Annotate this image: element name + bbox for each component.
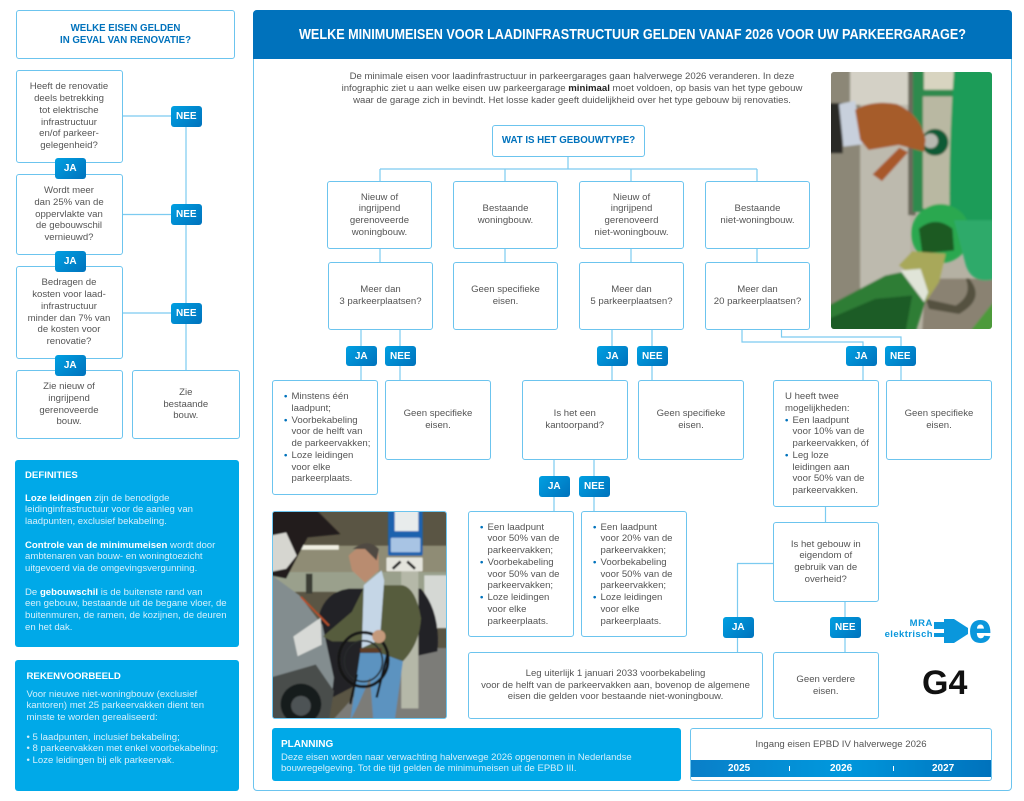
question: more than 3: 3 parkeerplaatsen?	[339, 296, 422, 307]
MRA text: MRA	[910, 618, 933, 629]
question: more than 3: Meer dan	[360, 284, 401, 295]
answer: no requirements	[453, 262, 558, 330]
badge NEE 3	[171, 303, 202, 324]
main header	[253, 10, 1012, 59]
building type 1: ingrijpend	[359, 203, 400, 214]
badge NEE 1: NEE	[176, 111, 197, 122]
definities text: en het dak.	[25, 622, 72, 633]
requirements: new housing: voor elke	[292, 462, 330, 472]
two options box: U heeft twee	[785, 391, 839, 402]
badge NEE: NEE	[584, 481, 605, 492]
answer: no requirements: Geen specifieke	[905, 408, 973, 419]
requirements: non-office: voor elke	[600, 604, 639, 615]
requirements: new housing	[272, 380, 378, 495]
renovation question 2: dan 25% van de	[34, 197, 104, 208]
renovation question 1: Heeft de renovatie	[30, 81, 108, 92]
two options box: •	[785, 450, 788, 461]
logo: G4: G4	[922, 664, 967, 702]
renovation question 3: Bedragen de	[42, 277, 96, 288]
planning heading: PLANNING	[281, 739, 333, 750]
requirements: new housing: voor de helft van	[292, 426, 362, 437]
timeline bar	[691, 760, 991, 777]
requirements: non-office: parkeerplaats.	[600, 616, 661, 626]
building type 4: niet-woningbouw.	[720, 215, 795, 226]
requirements: non-office: •	[593, 522, 596, 532]
badge JA 2	[55, 251, 86, 272]
requirements: new housing: Loze leidingen	[292, 450, 353, 461]
answer: no requirements	[385, 380, 491, 460]
renovation question 2: vernieuwd?	[44, 232, 94, 243]
badge JA 1	[55, 158, 86, 178]
timeline bar: 2027	[932, 763, 954, 774]
requirements: office: Voorbekabeling	[488, 557, 554, 568]
requirements: office: •	[480, 592, 483, 603]
two options box: leidingen aan	[792, 462, 850, 472]
renovation question 1: en/of parkeer-	[39, 128, 99, 139]
timeline caption: Ingang eisen EPBD IV halverwege 2026	[755, 739, 927, 750]
requirements: office: parkeervakken;	[488, 545, 553, 556]
planning text	[281, 752, 632, 774]
requirements: new housing: de parkeervakken;	[292, 438, 370, 449]
building type 2	[453, 181, 558, 249]
badge NEE	[637, 346, 668, 366]
requirements: new housing: Minstens één	[292, 391, 349, 402]
answer: no requirements: eisen.	[926, 420, 952, 431]
badge JA 1: JA	[64, 163, 77, 174]
definities text: ambtenaren van bouw- en woningtoezicht	[25, 551, 203, 562]
two options box: parkeervakken, óf	[792, 438, 869, 449]
question: office building: kantoorpand?	[545, 420, 604, 431]
planning text: Deze eisen worden naar verwachting halverwege 2026 opgenomen in Nederlandse	[281, 752, 632, 762]
elektrisch text: elektrisch	[885, 629, 933, 640]
result: existing build: bestaande	[163, 399, 208, 410]
badge JA: JA	[548, 481, 561, 492]
rekenvoorbeeld list: • Loze leidingen bij elk parkeervak.	[26, 755, 174, 766]
panel: rekenvoorbeeld	[15, 660, 239, 791]
requirements: office: voor 50% van de	[488, 533, 560, 544]
requirements: non-office	[581, 510, 687, 637]
bottom requirement box: Leg uiterlijk 1 januari 2033 voorbekabeling	[526, 668, 705, 679]
requirements: new housing: laadpunt;	[292, 403, 331, 414]
badge NEE: NEE	[835, 622, 856, 633]
definities text: De gebouwschil is de buitenste rand van	[25, 586, 203, 598]
question: more than 20: 20 parkeerplaatsen?	[714, 296, 801, 307]
rekenvoorbeeld intro: kantoren) met 25 parkeervakken dient ten	[26, 700, 204, 711]
badge JA: JA	[855, 351, 868, 362]
result: new build: Zie nieuw of	[43, 381, 95, 392]
badge NEE: NEE	[642, 351, 663, 362]
result: new build: bouw.	[56, 416, 82, 427]
definities text: uitgevoerd via de omgevingsvergunning.	[25, 563, 197, 574]
building type 4: Bestaande	[735, 203, 780, 214]
badge NEE	[830, 617, 860, 638]
photo: man with charging cable	[272, 511, 447, 719]
intro text	[342, 71, 802, 106]
badge JA	[723, 617, 754, 638]
badge NEE: NEE	[890, 351, 911, 362]
two options box: •	[785, 414, 788, 426]
logo: MRA elektrisch	[885, 607, 991, 651]
answer: no further requirements	[773, 652, 878, 719]
renovation question 2	[16, 174, 122, 255]
result: new build: gerenoveerde	[39, 404, 99, 416]
question: gebouwtype	[492, 125, 645, 157]
answer: no requirements	[638, 380, 744, 460]
planning text: bouwregelgeving. Tot die tijd gelden de minimumeisen uit de EPBD III.	[281, 763, 577, 774]
intro text: infographic ziet u aan welke eisen uw parkeergarage minimaal moet voldoen, op basis van het type gebouw	[342, 83, 802, 94]
requirements: non-office: Loze leidingen	[600, 592, 662, 603]
badge JA: JA	[355, 351, 368, 362]
answer: no further requirements: eisen.	[813, 686, 839, 696]
requirements: office: parkeervakken;	[488, 580, 553, 591]
building type 4	[705, 181, 810, 249]
badge NEE 2	[171, 204, 202, 224]
result: new build	[16, 370, 122, 439]
renovation question 1: infrastructuur	[41, 116, 97, 128]
question: office building: Is het een	[554, 408, 596, 419]
renovation question 3: infrastructuur	[41, 301, 97, 312]
requirements: office: Een laadpunt	[488, 522, 544, 532]
answer: no requirements: eisen.	[425, 420, 451, 431]
definities text: buitenmuren, de ramen, de kozijnen, de deuren	[25, 610, 227, 621]
renovation title box: IN GEVAL VAN RENOVATIE?	[60, 34, 191, 46]
requirements: office: voor elke	[488, 604, 526, 615]
badge NEE	[579, 476, 610, 496]
requirements: office: •	[480, 557, 483, 568]
definities heading: DEFINITIES	[25, 470, 78, 481]
requirements: non-office: Voorbekabeling	[600, 557, 667, 568]
renovation question 3: de kosten voor	[38, 324, 100, 335]
badge JA: JA	[606, 351, 619, 362]
requirements: non-office: parkeervakken;	[600, 545, 666, 556]
requirements: non-office: •	[593, 557, 596, 568]
requirements: office	[468, 510, 574, 637]
bottom requirement box: eisen die gelden voor bestaande niet-woningbouw.	[508, 691, 723, 702]
answer: no further requirements: Geen verdere	[796, 674, 855, 685]
intro text: De minimale eisen voor laadinfrastructuur in parkeergarages gaan halverwege 2026 veranderen. In deze	[350, 71, 794, 82]
definities text: laadpunten, exclusief bekabeling.	[25, 516, 167, 527]
renovation question 1: deels betrekking	[34, 93, 104, 104]
answer: no requirements: eisen.	[678, 420, 704, 431]
requirements: office: •	[480, 522, 483, 532]
requirements: new housing: •	[284, 414, 287, 426]
main panel frame	[253, 10, 1012, 791]
question: government building	[773, 522, 878, 602]
rekenvoorbeeld list	[26, 732, 218, 766]
badge JA 3: JA	[64, 360, 77, 371]
building type 1: Nieuw of	[361, 192, 398, 202]
badge JA 2: JA	[64, 256, 77, 267]
definities text: Loze leidingen zijn de benodigde	[25, 492, 170, 504]
badge NEE 2: NEE	[176, 209, 197, 220]
building type 3: gerenoveerd	[605, 215, 658, 226]
building type 3: Nieuw of	[613, 192, 650, 202]
two options box: Een laadpunt	[792, 414, 849, 426]
requirements: office: voor 50% van de	[488, 568, 560, 580]
requirements: new housing: •	[284, 391, 287, 402]
answer: no requirements: Geen specifieke	[471, 284, 540, 295]
question: more than 5: 5 parkeerplaatsen?	[590, 296, 673, 307]
question: more than 5	[579, 262, 684, 330]
question: government building: gebruik van de	[794, 562, 857, 573]
renovation title box	[16, 10, 235, 59]
result: existing build	[132, 370, 240, 439]
requirements: office: parkeerplaats.	[488, 616, 548, 626]
renovation question 2: oppervlakte van	[35, 209, 103, 220]
bottom requirement box: voor de helft van de parkeervakken aan, bovenop de algemene	[481, 680, 750, 691]
renovation question 2: Wordt meer	[44, 185, 94, 196]
requirements: non-office: voor 20% van de	[600, 533, 672, 544]
renovation question 2: de gebouwschil	[36, 220, 102, 231]
building type 1: gerenoveerde	[350, 215, 409, 226]
renovation question 3: minder dan 7% van	[28, 312, 110, 324]
badge JA	[346, 346, 376, 366]
building type 3: niet-woningbouw.	[594, 227, 669, 238]
badge JA	[539, 476, 570, 496]
intro text: waar de garage zich in bevindt. Het losse kader geeft duidelijkheid over het type gebouw bij renovaties.	[353, 94, 791, 106]
photo: hands at charging station	[831, 72, 992, 329]
panel: definities	[15, 460, 239, 647]
two options box: Leg loze	[792, 450, 829, 461]
badge NEE 3: NEE	[176, 308, 197, 319]
question: gebouwtype: WAT IS HET GEBOUWTYPE?	[502, 135, 635, 146]
result: new build: ingrijpend	[48, 393, 90, 404]
two options box	[773, 380, 878, 507]
requirements: new housing: •	[284, 450, 287, 461]
definities text: een gebouw, bestaande uit de begane vloer, de	[25, 598, 227, 609]
definities text: leidinginfrastructuur voor de aanleg van	[25, 504, 193, 515]
question: office building	[522, 380, 628, 460]
rekenvoorbeeld list: • 5 laadpunten, inclusief bekabeling;	[26, 732, 180, 742]
timeline bar: 2026	[830, 763, 852, 774]
renovation question 1: tot elektrische	[39, 105, 99, 116]
rekenvoorbeeld intro	[26, 688, 204, 723]
badge JA	[846, 346, 876, 366]
rekenvoorbeeld heading: REKENVOORBEELD	[26, 671, 121, 682]
badge NEE	[885, 346, 916, 366]
question: more than 20: Meer dan	[737, 284, 778, 295]
renovation question 3: renovatie?	[47, 336, 91, 347]
building type 1: woningbouw.	[352, 227, 407, 238]
badge JA 3	[55, 355, 86, 376]
icon: plug	[934, 619, 968, 643]
answer: no requirements: eisen.	[493, 296, 518, 307]
renovation question 1	[16, 70, 122, 163]
timeline bar: 2025	[728, 763, 750, 774]
question: more than 20	[705, 262, 810, 330]
result: existing build: Zie	[179, 387, 192, 398]
rekenvoorbeeld list: • 8 parkeervakken met enkel voorbekabeling;	[26, 743, 218, 754]
building type 1	[327, 181, 432, 249]
e mark: e	[969, 607, 991, 651]
badge NEE	[385, 346, 416, 366]
requirements: new housing: parkeerplaats.	[292, 473, 352, 484]
two options box: voor 50% van de	[792, 473, 864, 484]
two options box: voor 10% van de	[792, 426, 864, 437]
requirements: non-office: Een laadpunt	[600, 522, 657, 532]
bottom requirement box	[468, 652, 763, 719]
requirements: non-office: •	[593, 592, 596, 603]
question: more than 3	[328, 262, 433, 330]
renovation title box: WELKE EISEN GELDEN	[71, 23, 180, 34]
badge NEE 1	[171, 106, 202, 126]
answer: no requirements: Geen specifieke	[404, 408, 472, 419]
badge JA	[597, 346, 628, 366]
renovation question 3: kosten voor laad-	[32, 289, 106, 300]
question: government building: Is het gebouw in	[791, 538, 861, 550]
badge JA: JA	[732, 622, 745, 633]
result: existing build: bouw.	[173, 410, 198, 421]
definities text	[25, 492, 227, 633]
rekenvoorbeeld intro: Voor nieuwe niet-woningbouw (exclusief	[26, 688, 197, 700]
question: government building: eigendom of	[799, 550, 852, 561]
panel: planning	[272, 728, 681, 780]
requirements: non-office: voor 50% van de	[600, 568, 672, 580]
renovation question 3	[16, 266, 122, 359]
badge NEE: NEE	[390, 351, 411, 362]
definities text: Controle van de minimumeisen wordt door	[25, 540, 215, 550]
renovation question 1: gelegenheid?	[40, 140, 98, 151]
two options box: parkeervakken.	[792, 485, 858, 496]
two options box: mogelijkheden:	[785, 403, 850, 414]
question: government building: overheid?	[805, 574, 847, 585]
timeline	[690, 728, 992, 781]
building type 3: ingrijpend	[611, 203, 652, 214]
answer: no requirements	[886, 380, 992, 460]
building type 2: Bestaande	[483, 203, 528, 214]
question: more than 5: Meer dan	[611, 284, 652, 295]
requirements: non-office: parkeervakken;	[600, 580, 666, 591]
requirements: office: Loze leidingen	[488, 592, 549, 603]
building type 2: woningbouw.	[478, 215, 533, 226]
requirements: new housing: Voorbekabeling	[292, 414, 358, 426]
rekenvoorbeeld intro: minste te worden gerealiseerd:	[26, 712, 158, 723]
building type 3	[579, 181, 684, 249]
answer: no requirements: Geen specifieke	[657, 408, 725, 419]
